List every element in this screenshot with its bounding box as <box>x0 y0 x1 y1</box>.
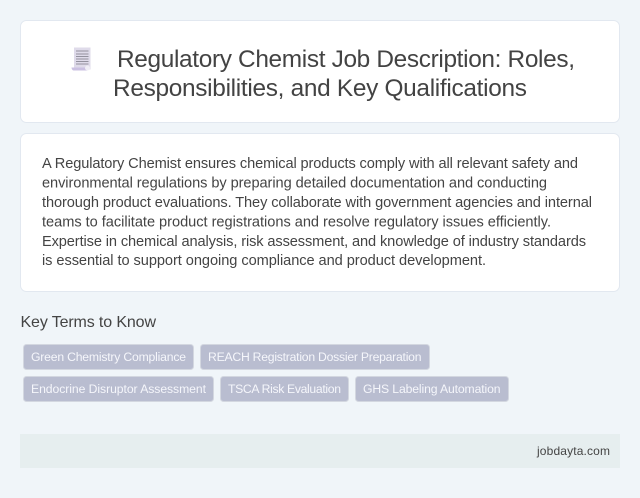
title <box>113 46 575 102</box>
title: Responsibilities, and Key Qualifications <box>113 75 527 102</box>
tag: TSCA risk evaluation <box>220 376 348 402</box>
heading: key terms: Key Terms to Know <box>20 314 156 331</box>
tag: REACH registration dossier preparation: REACH Registration Dossier Preparation <box>208 350 422 364</box>
tag: endocrine disruptor assessment <box>24 376 214 402</box>
footer source text: jobdayta.com <box>536 444 610 458</box>
title: Regulatory Chemist Job Description: Roles, <box>117 46 575 73</box>
tag: GHS labeling automation <box>356 376 508 402</box>
text block: description: A Regulatory Chemist ensures chemical products comply with all relevant safety and <box>42 156 578 172</box>
tag: endocrine disruptor assessment: Endocrine Disruptor Assessment <box>31 382 207 396</box>
tag: TSCA risk evaluation: TSCA Risk Evaluation <box>228 382 341 396</box>
tag: green chemistry compliance <box>24 344 194 370</box>
tag: green chemistry compliance: Green Chemistry Compliance <box>31 350 186 364</box>
text block: description: thorough product evaluations. They collaborate with government agencies and internal <box>42 195 592 211</box>
text block: description: is essential to support ongoing compliance and product development. <box>42 253 486 269</box>
tag: REACH registration dossier preparation <box>200 344 430 370</box>
panel: title card <box>20 20 620 122</box>
text block: description: environmental regulations by preparing detailed documentation and conducting <box>42 176 547 192</box>
text block: description: teams to facilitate product registrations and resolve regulatory issues efficiently. <box>42 214 551 230</box>
panel: description card <box>20 134 620 292</box>
footer bar <box>20 434 620 468</box>
tag: GHS labeling automation: GHS Labeling Automation <box>363 382 500 396</box>
text block: description <box>42 156 592 269</box>
icon: document scroll <box>72 48 90 70</box>
text block: description: Expertise in chemical analysis, risk assessment, and knowledge of industry standards <box>42 234 586 250</box>
